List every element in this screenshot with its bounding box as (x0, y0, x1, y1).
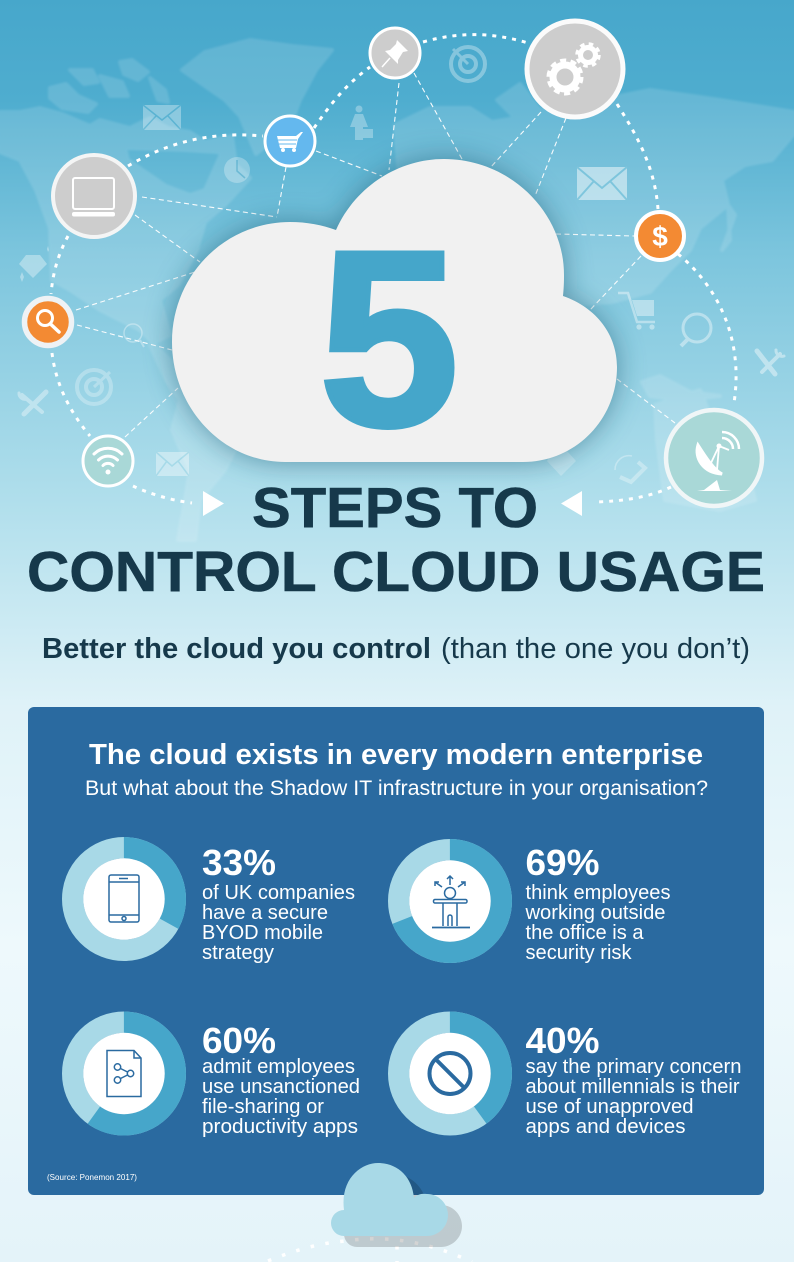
subtitle (42, 633, 750, 665)
title line 2: CONTROL CLOUD USAGE (27, 540, 765, 604)
description 69%: security risk (526, 942, 632, 964)
bottom cloud shape (331, 1163, 448, 1236)
icon: shopping cart faint (618, 293, 655, 330)
donut 33% (73, 848, 175, 950)
icon: diamond left (19, 246, 49, 282)
description 60%: file-sharing or (202, 1096, 324, 1118)
icon: clock (224, 157, 250, 183)
node: laptop (53, 155, 135, 237)
description 33% (202, 882, 355, 964)
subtitle bold: Better the cloud you control (42, 633, 431, 665)
icon: envelope lower left (156, 452, 189, 476)
title (27, 476, 765, 604)
subtitle regular: (than the one you don’t) (441, 633, 750, 665)
stat: 60% (73, 1020, 360, 1138)
icon: target top (451, 47, 485, 81)
icon: tools left (19, 392, 46, 414)
cloud shadow (172, 159, 617, 462)
icon: phone (615, 456, 645, 482)
big number 5: 5 (319, 199, 459, 478)
donut 60% (73, 1022, 175, 1125)
icon: diamond right (547, 451, 576, 476)
main cloud (172, 159, 617, 462)
world map (0, 40, 794, 540)
icon: envelope right (577, 167, 627, 200)
icon: tools right (757, 350, 784, 374)
panel heading: The cloud exists in every modern enterprise (89, 739, 703, 771)
description 33%: of UK companies (202, 882, 355, 904)
donut 40% (399, 1022, 501, 1125)
description 33%: have a secure (202, 902, 328, 924)
stat: 33% (73, 842, 355, 964)
panel: shadow IT stats (28, 707, 764, 1195)
icon: shared document (107, 1050, 141, 1096)
description 40%: say the primary concern (526, 1056, 742, 1078)
donut 69% (399, 850, 501, 952)
value 40%: 40% (526, 1020, 600, 1061)
node: push pin (370, 28, 420, 78)
description 69% (524, 882, 670, 964)
description 33%: BYOD mobile (202, 922, 323, 944)
decorative faint icons (19, 47, 784, 482)
icon: magnifier left (124, 324, 144, 347)
bottom cloud shadow (344, 1174, 462, 1247)
title line 1: STEPS TO (252, 476, 538, 540)
value 60%: 60% (202, 1020, 276, 1061)
description 60%: productivity apps (202, 1116, 358, 1138)
description 60% (202, 1056, 360, 1138)
description 69%: working outside (524, 902, 666, 924)
value 69%: 69% (526, 842, 600, 883)
source note: (Source: Ponemon 2017) (47, 1172, 137, 1182)
description 40% (526, 1056, 742, 1138)
network connections (51, 35, 736, 503)
stat: 69% (399, 842, 670, 964)
node: dollar (636, 212, 684, 260)
bottom dotted arcs (268, 1239, 472, 1262)
description 40%: use of unapproved (526, 1096, 694, 1118)
node: search (24, 298, 72, 346)
dotted ring (51, 35, 736, 503)
description 40%: apps and devices (526, 1116, 686, 1138)
icon: magnifier right (681, 314, 711, 346)
icon: tablet (109, 875, 139, 922)
icon: person with arrows (432, 876, 470, 928)
node: wifi (83, 436, 133, 486)
arrow: right (561, 491, 582, 516)
panel subheading: But what about the Shadow IT infrastructure in your organisation? (85, 776, 708, 800)
description 40%: about millennials is their (526, 1076, 740, 1098)
node: dollar: $ (652, 221, 668, 252)
description 60%: admit employees (202, 1056, 355, 1078)
description 69%: the office is a (526, 922, 644, 944)
arrow: left (203, 491, 224, 516)
description 69%: think employees (526, 882, 670, 904)
node: gears (527, 21, 623, 117)
bottom cloud (331, 1163, 462, 1247)
icon: target left (77, 370, 111, 404)
description 33%: strategy (202, 942, 274, 964)
node: satellite dish (666, 410, 762, 506)
icon: prohibited sign (430, 1053, 470, 1094)
value 33%: 33% (202, 842, 276, 883)
thin dashed links (76, 73, 675, 437)
description 60%: use unsanctioned (202, 1076, 360, 1098)
icon: woman shopper (350, 106, 373, 140)
node: shopping cart (265, 116, 315, 166)
stat: 40% (399, 1020, 742, 1138)
icon: envelope left (143, 105, 181, 130)
